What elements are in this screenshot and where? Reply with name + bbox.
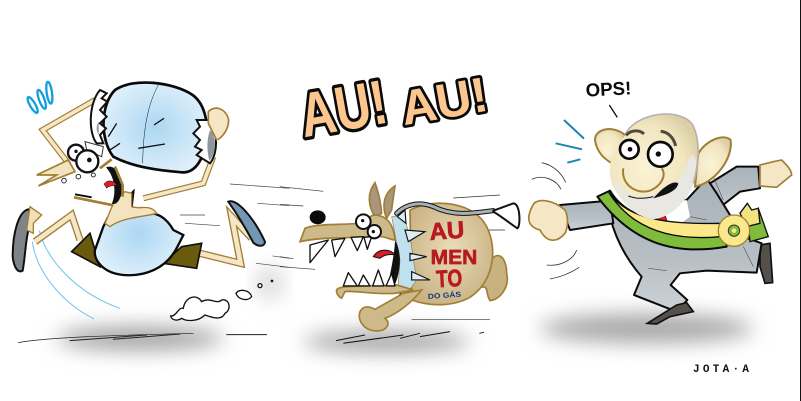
barking dog with AUMENTO body xyxy=(280,183,519,352)
hand on cylinder xyxy=(208,108,229,140)
ground shadow xyxy=(303,331,470,352)
dress xyxy=(95,192,183,275)
open mouth xyxy=(106,167,122,204)
first AU!: AU! xyxy=(294,67,392,150)
blue motion curves xyxy=(32,231,120,319)
grey hair xyxy=(625,114,698,183)
dog eyes xyxy=(356,214,381,238)
teeth xyxy=(310,237,395,286)
signature: JOTA·A xyxy=(693,364,749,376)
lower jaw xyxy=(337,285,413,298)
open mouth back xyxy=(388,240,400,288)
sash ribbons xyxy=(740,203,760,227)
speed lines xyxy=(280,187,505,343)
spiked collar xyxy=(392,215,417,303)
ears xyxy=(369,183,395,218)
lettering: AUMENTO: AU xyxy=(429,217,465,246)
rear hand xyxy=(760,160,792,187)
right arm xyxy=(143,157,213,198)
surprise marks xyxy=(556,120,584,163)
suit folds xyxy=(648,177,753,271)
yellow sash band xyxy=(608,192,720,238)
running man with gas cylinder xyxy=(13,81,289,350)
hat brim and hair xyxy=(37,160,75,186)
shorts xyxy=(72,233,202,268)
right border xyxy=(800,0,801,401)
front hand xyxy=(529,201,567,240)
front leg and paw xyxy=(359,290,422,331)
beard xyxy=(613,155,697,219)
dog nose xyxy=(310,210,326,224)
cylinder left collar xyxy=(91,90,107,143)
shoe xyxy=(647,303,693,324)
eyes xyxy=(620,140,673,167)
dust cloud xyxy=(171,280,273,320)
red tie xyxy=(653,215,668,225)
eyebrows xyxy=(626,131,676,146)
dog body xyxy=(410,203,493,305)
right ear xyxy=(695,137,731,187)
tongue xyxy=(104,181,117,188)
chest xyxy=(105,192,157,227)
left arm xyxy=(43,100,95,163)
jaw and chin xyxy=(74,167,123,205)
legs xyxy=(35,215,252,263)
dust shadow xyxy=(257,267,283,300)
nose xyxy=(623,168,664,192)
ground lines xyxy=(18,333,267,343)
mouth xyxy=(653,182,678,198)
OPS! speech: OPS! xyxy=(585,77,632,101)
gas cylinder xyxy=(104,83,207,172)
head xyxy=(610,114,698,211)
left foot xyxy=(27,207,42,233)
lettering: AUMENTO: TO xyxy=(436,265,463,293)
heading: AU! AU! xyxy=(294,67,492,150)
left flip-flop xyxy=(13,209,33,271)
rear sleeve xyxy=(697,167,760,210)
eyes xyxy=(68,145,98,172)
leash xyxy=(397,203,519,228)
cylinder right collar xyxy=(193,120,216,163)
cylinder marks xyxy=(108,85,165,163)
lettering: AUMENTO xyxy=(429,217,477,293)
sash tail xyxy=(748,208,768,242)
president figure xyxy=(529,77,792,343)
tongue xyxy=(373,250,395,258)
suit body and legs xyxy=(610,178,762,312)
upper snout xyxy=(300,215,395,242)
speech tick xyxy=(609,105,617,117)
lettering: DO GÁS: DO GÁS xyxy=(427,290,461,301)
sash rosette xyxy=(718,215,750,246)
rear trouser leg and shoe xyxy=(760,243,773,283)
ground shadow xyxy=(57,326,223,350)
right flip-flop xyxy=(228,201,265,246)
front sleeve xyxy=(560,200,613,230)
sweat drops xyxy=(26,81,53,114)
motion arcs xyxy=(532,163,579,279)
hind leg xyxy=(467,256,507,301)
collar spikes xyxy=(397,210,430,302)
ground shadow xyxy=(540,313,753,343)
second AU!: AU! xyxy=(397,68,492,136)
shirt xyxy=(643,200,690,227)
speed lines xyxy=(180,184,289,267)
green sash band xyxy=(597,191,727,249)
lettering: AUMENTO: MEN xyxy=(431,246,477,269)
left ear xyxy=(595,129,625,167)
